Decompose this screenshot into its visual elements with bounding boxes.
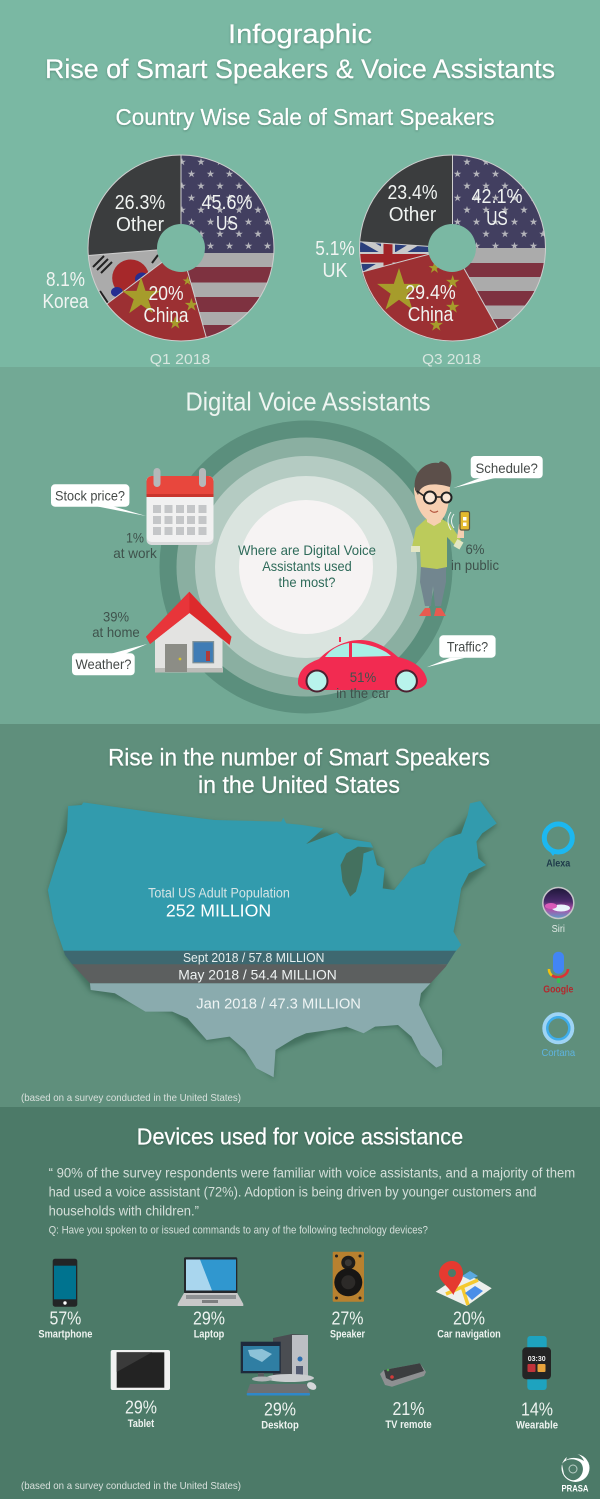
band label: Sept 2018: Sept 2018 / 57.8 MILLION: [183, 951, 324, 965]
logo: PRASA: PRASA: [562, 1484, 589, 1494]
device: car navigation: [436, 1261, 501, 1341]
device: wearable: Wearable: [516, 1420, 558, 1432]
device: smartphone: [38, 1259, 92, 1341]
pie labels: Q1 2018: US: [216, 213, 238, 235]
device: laptop: [178, 1257, 243, 1341]
slice dividers: [360, 155, 546, 341]
pie labels: Q3 2018: 42.1%: [472, 186, 523, 208]
survey question: Q: Have you spoken to or issued commands to any of the following technology devices?: [49, 1224, 428, 1236]
pie chart: Q3 2018: [359, 154, 546, 342]
footnote: (based on a survey conducted in the United States): [21, 1480, 241, 1492]
device: car navigation: Car navigation: [437, 1329, 501, 1341]
pie labels: Q1 2018: 8.1%: [46, 269, 85, 291]
device: desktop: [241, 1334, 318, 1432]
device: smartphone: Smartphone: [38, 1329, 92, 1341]
device: speaker: 27%: [332, 1307, 364, 1328]
pie labels: Q3 2018: UK: [322, 260, 348, 282]
pie labels: Q3 2018: 5.1%: [315, 238, 355, 260]
pie chart: Q1 2018: [88, 154, 274, 342]
label: in public: in public: [451, 557, 499, 573]
device: TV remote: TV remote: [385, 1419, 432, 1431]
icon: man with phone: [411, 461, 470, 616]
icon: Cortana: [541, 1014, 575, 1059]
label: Q3 2018: Q3 2018: [422, 351, 481, 368]
device: speaker: [330, 1252, 366, 1341]
label: in public: [451, 541, 499, 573]
callout: schedule: Schedule?: [476, 460, 538, 476]
device: desktop: Desktop: [261, 1420, 299, 1432]
icon: house: [146, 592, 232, 672]
icon: Google mic: [543, 952, 573, 996]
callout: weather: Weather?: [76, 656, 132, 672]
icon: car: [298, 637, 427, 692]
label: at work: [113, 530, 158, 561]
device: smartphone: 57%: [50, 1307, 81, 1328]
pie labels: Q3 2018: [315, 182, 523, 326]
device: tablet: [111, 1350, 170, 1430]
center question: the most?: [278, 574, 336, 590]
label: at work: at work: [113, 545, 158, 561]
map: US with population bands: [48, 801, 497, 1077]
heading: digital voice assistants: Digital Voice Assistants: [186, 386, 430, 416]
device: laptop: Laptop: [194, 1329, 225, 1341]
pie labels: Q1 2018: 20%: [148, 283, 184, 305]
slice: UK 5.1%: [359, 242, 429, 272]
callout: stock price: [51, 484, 146, 516]
logo: PRASA: [562, 1452, 590, 1494]
slice: China 29.4%: [362, 254, 498, 342]
heading: rise in the number of smart speakers: [108, 744, 490, 799]
pie labels: Q3 2018: 29.4%: [405, 282, 456, 304]
pie labels: Q3 2018: US: [486, 208, 508, 230]
callout: traffic: Traffic?: [447, 639, 488, 655]
label: at home: 39%: [103, 609, 129, 625]
quote text: households with children.”: [49, 1204, 199, 1219]
footnote: (based on a survey conducted in the United States): [21, 1092, 241, 1104]
device: TV remote: [380, 1363, 432, 1431]
label: in the car: [336, 669, 390, 701]
quote text: [49, 1166, 575, 1219]
pie labels: Q3 2018: China: [408, 304, 454, 326]
device: tablet: 29%: [125, 1397, 157, 1418]
slice: China 20%: [108, 262, 206, 340]
label: Q1 2018: Q1 2018: [150, 351, 210, 368]
slice: Korea 8.1%: [88, 250, 162, 304]
icon: Cortana: Cortana: [541, 1047, 575, 1059]
callout: weather: [72, 644, 147, 675]
icon: Alexa: [544, 824, 572, 870]
device: wearable: [516, 1336, 558, 1432]
label: at home: at home: [92, 624, 140, 640]
band label: Jan 2018: Jan 2018 / 47.3 MILLION: [196, 995, 361, 1012]
band label: May 2018: May 2018 / 54.4 MILLION: [178, 967, 337, 983]
label: at work: 1%: [126, 530, 144, 546]
device: wearable: 03:30: [528, 1356, 546, 1363]
center question: [238, 542, 376, 590]
center question: Where are Digital Voice: [238, 542, 376, 558]
label: at home: [92, 609, 140, 640]
title: [45, 19, 555, 84]
device: desktop: 29%: [264, 1399, 296, 1420]
label: total US adult population: [148, 885, 290, 921]
slice: US 42.1%: [453, 156, 545, 328]
device: speaker: Speaker: [330, 1329, 366, 1341]
label: in public: 6%: [466, 541, 484, 557]
panel: digital voice assistants: [0, 367, 600, 724]
panel: country wise sale: [0, 0, 600, 368]
pie labels: Q3 2018: 23.4%: [388, 182, 438, 204]
heading: country wise sale: Country Wise Sale of Smart Speakers: [116, 104, 494, 130]
pie labels: Q1 2018: 26.3%: [115, 192, 165, 214]
pie labels: Q1 2018: Korea: [42, 291, 89, 313]
panel: devices used for voice assistance: [0, 1107, 600, 1499]
device: car navigation: 20%: [453, 1307, 485, 1328]
slice: US 45.6%: [182, 156, 274, 337]
heading: devices: Devices used for voice assistance: [137, 1123, 463, 1149]
label: in the car: in the car: [336, 685, 390, 701]
callout: traffic: [427, 635, 496, 667]
pie labels: Q1 2018: 45.6%: [202, 192, 253, 214]
pie labels: Q3 2018: Other: [389, 204, 437, 226]
label: total US adult population: 252 MILLION: [166, 901, 271, 921]
icon: Google mic: Google: [543, 984, 573, 996]
label: total US adult population: Total US Adult Population: [148, 885, 290, 900]
title: Infographic: [228, 19, 372, 49]
quote text: “ 90% of the survey respondents were familiar with voice assistants, and a majority of them: [49, 1166, 575, 1181]
device: laptop: 29%: [193, 1307, 225, 1328]
center question: Assistants used: [262, 558, 352, 574]
quote text: had used a voice assistant (72%). Adoption is being driven by younger customers and: [49, 1185, 536, 1200]
title: Rise of Smart Speakers & Voice Assistants: [45, 54, 555, 84]
pie labels: Q1 2018: China: [144, 305, 189, 327]
panel: smart speakers in the US: [0, 724, 600, 1107]
pie labels: Q1 2018: [42, 192, 253, 327]
slice dividers: [88, 155, 274, 341]
concentric rings: [160, 420, 452, 714]
icon: Siri: Siri: [552, 923, 565, 935]
icon: Alexa: Alexa: [546, 858, 570, 870]
heading: rise in the number of smart speakers: Rise in the number of Smart Speakers: [108, 744, 490, 772]
label: in the car: 51%: [350, 669, 376, 685]
callout: schedule: [454, 456, 543, 488]
callout: stock price: Stock price?: [55, 488, 125, 504]
device: tablet: Tablet: [128, 1418, 154, 1430]
icon: Siri: [543, 888, 574, 935]
device: wearable: 14%: [521, 1399, 553, 1420]
icon: calendar: [146, 468, 214, 545]
pie labels: Q1 2018: Other: [116, 214, 164, 236]
map shadow: [48, 803, 497, 1079]
heading: rise in the number of smart speakers: in the United States: [198, 772, 400, 799]
device: TV remote: 21%: [392, 1398, 424, 1419]
